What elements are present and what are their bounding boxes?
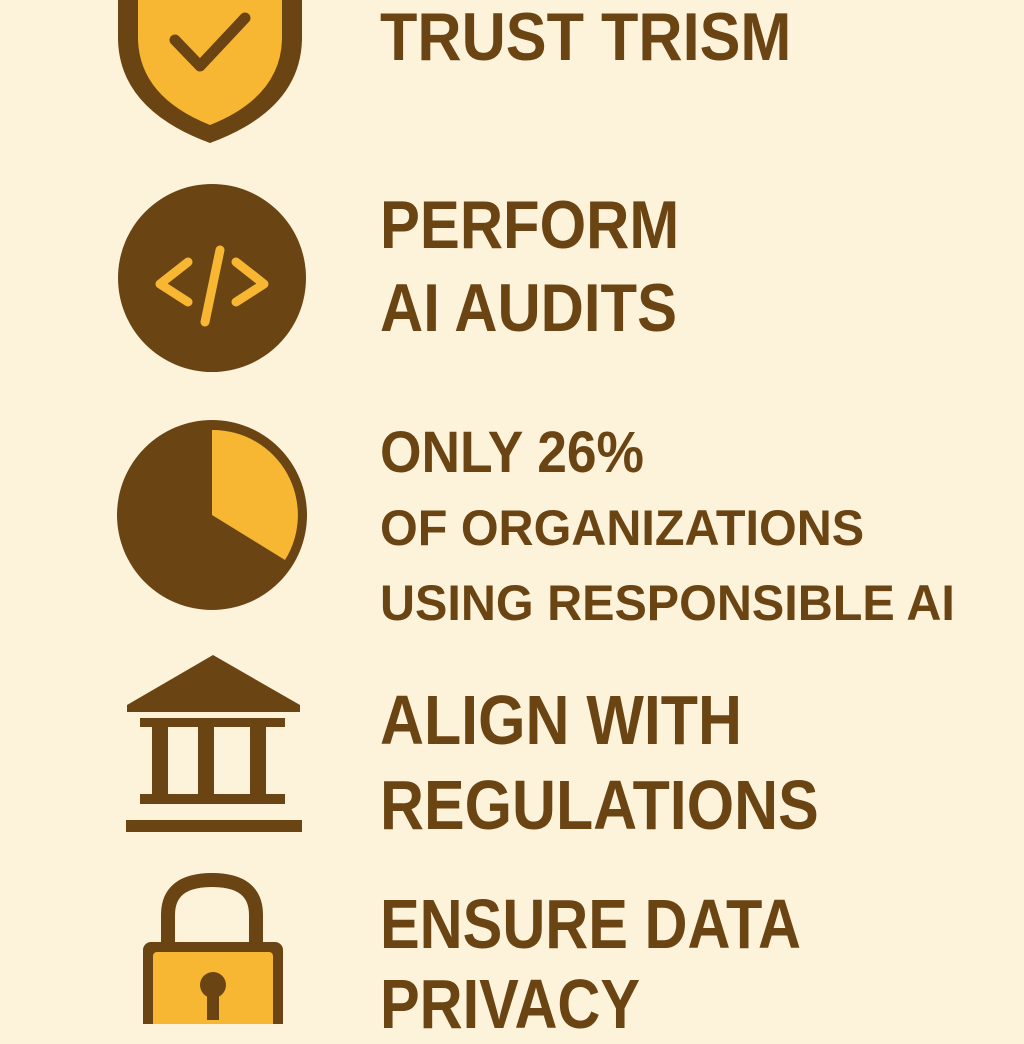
- text: ensure data privacy: ENSURE DATA: [380, 885, 801, 963]
- text: perform ai audits: AI AUDITS: [380, 270, 677, 346]
- text: align with regulations: REGULATIONS: [380, 766, 819, 844]
- text: organizations stat: OF ORGANIZATIONS: [380, 500, 864, 556]
- text: ensure data privacy: [380, 885, 801, 1043]
- text: ensure data privacy: PRIVACY: [380, 965, 640, 1043]
- heading: trust trism: TRUST TRISM: [380, 0, 791, 75]
- text: organizations stat: [380, 500, 955, 631]
- icon: shield: [118, 0, 302, 143]
- text: organizations stat: USING RESPONSIBLE AI: [380, 575, 955, 631]
- icon: bank building: [126, 655, 302, 832]
- text: perform ai audits: PERFORM: [380, 187, 679, 263]
- text: perform ai audits: [380, 187, 679, 346]
- text: only 26%: ONLY 26%: [380, 420, 644, 485]
- text: align with regulations: ALIGN WITH: [380, 681, 742, 759]
- icon: pie chart: [117, 420, 307, 610]
- text: align with regulations: [380, 681, 819, 844]
- icon: padlock: [143, 880, 283, 1042]
- icon: code circle: [118, 184, 306, 372]
